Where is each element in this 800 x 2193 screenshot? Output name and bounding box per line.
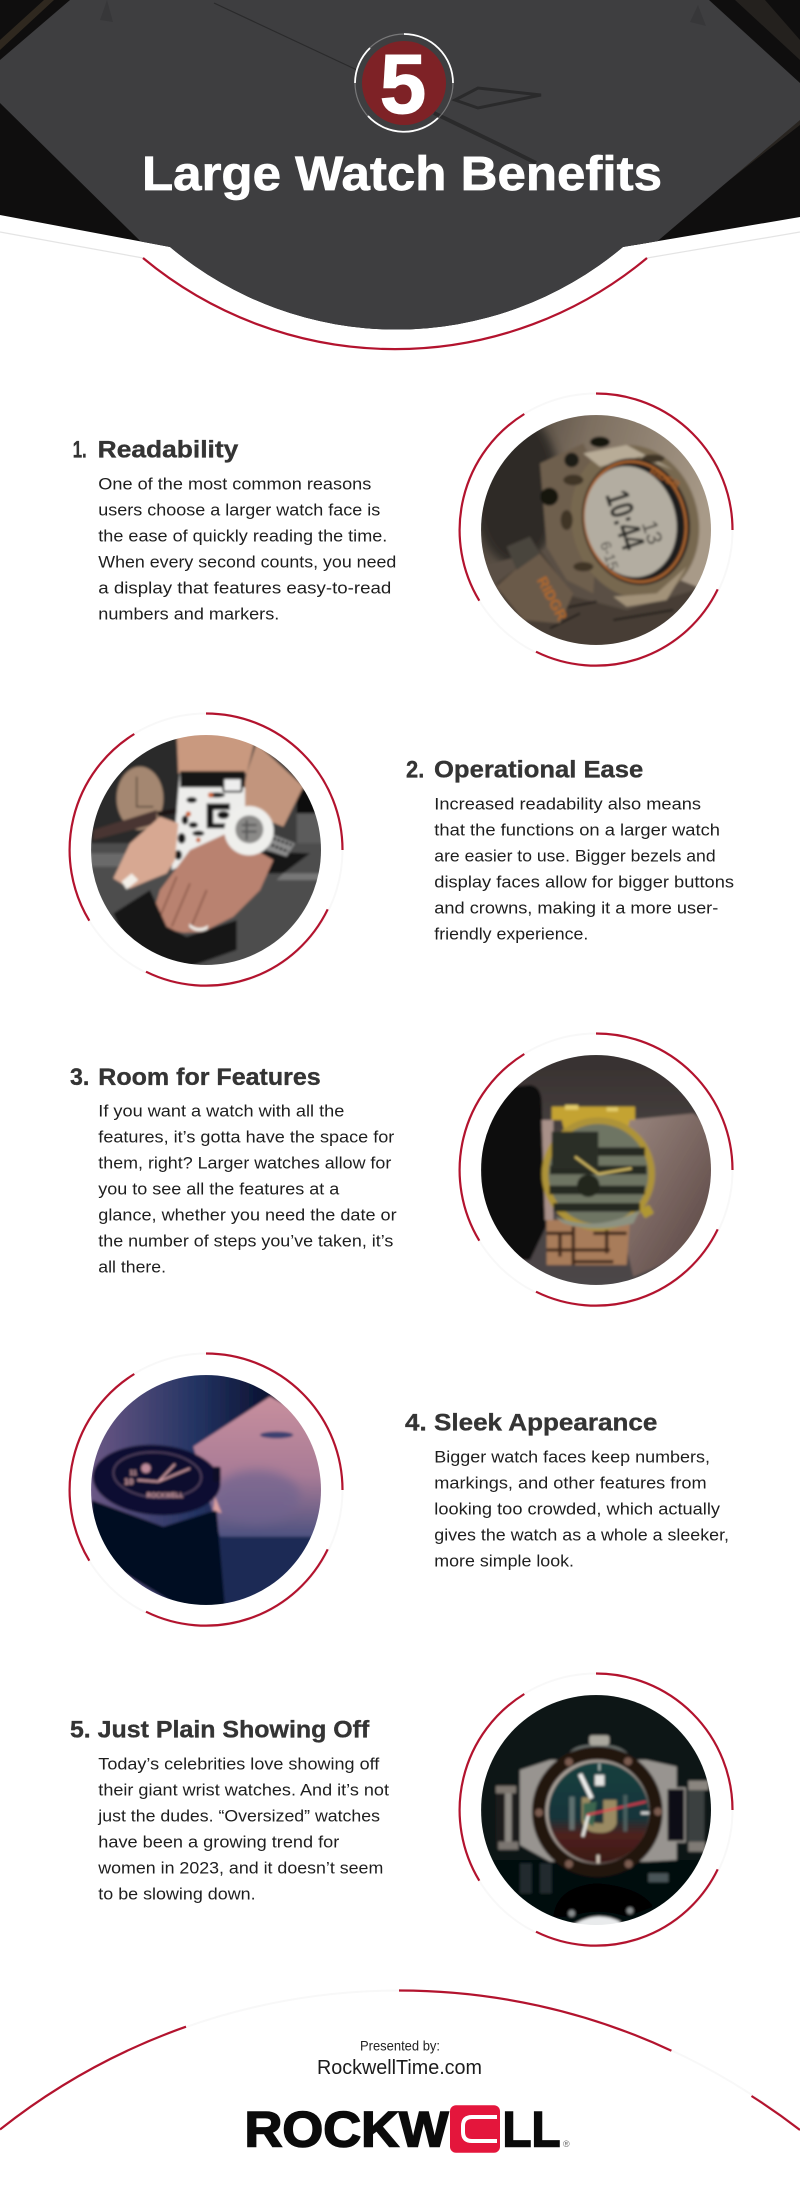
heading 4: Sleek Appearance (434, 1410, 657, 1437)
logo: Rockwell: ® (563, 2139, 570, 2149)
photo 1: camo digital watch: RIDGR (533, 574, 570, 624)
body text 4: markings, and other features from (434, 1474, 707, 1493)
body text 3: glance, whether you need the date or (98, 1206, 397, 1225)
body text 2: are easier to use. Bigger bezels and (434, 846, 716, 865)
body text 2 (434, 794, 734, 943)
body text 4 (434, 1448, 729, 1571)
photo 5: steel watch on black (480, 1693, 713, 1927)
ring arcs 3 (460, 1034, 732, 1306)
heading 3: Room for Features (98, 1064, 321, 1091)
body text 5: to be slowing down. (98, 1884, 256, 1903)
footer arc (0, 1990, 800, 2130)
body text 4: looking too crowded, which actually (434, 1500, 721, 1519)
body text 2: friendly experience. (434, 924, 588, 943)
logo: Rockwell (244, 2102, 570, 2158)
heading 4: 4. (405, 1410, 427, 1437)
heading 1: Readability (98, 437, 239, 464)
body text 3: features, it’s gotta have the space for (98, 1128, 395, 1147)
photo 3: gold flag watch on wrist (480, 1053, 717, 1287)
heading 5: 5. (70, 1717, 91, 1744)
body text 3: you to see all the features at a (98, 1180, 340, 1199)
website: RockwellTime.com (317, 2057, 482, 2079)
photo 1: camo digital watch: RIDGR (648, 466, 681, 491)
photo 4: dark watch in blue and pink: 10 (124, 1477, 134, 1487)
ring arcs 5 (460, 1674, 732, 1946)
photo 4: dark watch in blue and pink: ROCKWELL (147, 1490, 184, 1499)
body text 2: display faces allow for bigger buttons (434, 872, 734, 891)
header red arc (143, 258, 647, 349)
logo: Rockwell: LL (502, 2102, 560, 2158)
heading 1: 1. (73, 437, 87, 464)
body text 3 (98, 1102, 397, 1277)
body text 5: have been a growing trend for (98, 1832, 340, 1851)
section 5: just plain showing off (70, 1717, 389, 1903)
body text 4: gives the watch as a whole a sleeker, (434, 1526, 729, 1545)
body text 5 (97, 1754, 389, 1903)
ring arcs 1 (460, 394, 732, 666)
header: dark watch background (0, 0, 800, 345)
body text 3: them, right? Larger watches allow for (98, 1154, 392, 1173)
badge: number 5: 5 (380, 37, 426, 131)
heading 2: Operational Ease (434, 757, 643, 784)
photo 4: dark watch in blue and pink: 11 (129, 1468, 137, 1477)
heading 5: Just Plain Showing Off (98, 1717, 370, 1744)
badge: number 5 (355, 34, 453, 132)
body text 1: users choose a larger watch face is (98, 500, 380, 519)
body text 3: If you want a watch with all the (98, 1102, 344, 1121)
photo 1: camo digital watch: 10:44 (597, 486, 651, 555)
title: Large Watch Benefits (142, 148, 662, 201)
photo 2: hand tying shoe with white watch (90, 733, 323, 967)
body text 1: When every second counts, you need (98, 552, 396, 571)
body text 1: a display that features easy-to-read (98, 578, 391, 597)
body text 4: Bigger watch faces keep numbers, (434, 1448, 710, 1467)
icon: watch hand shadows (214, 3, 541, 163)
body text 3: all there. (98, 1258, 166, 1277)
body text 2: that the functions on a larger watch (434, 820, 720, 839)
faint divider strokes beside header (0, 232, 800, 258)
heading 3: 3. (70, 1064, 89, 1091)
ring arcs 2 (70, 714, 342, 986)
photo 1: camo digital watch: 6-15 (596, 540, 620, 572)
body text 4: more simple look. (434, 1552, 574, 1571)
section 3: room for features (70, 1064, 397, 1277)
heading 2: 2. (406, 757, 424, 784)
icon: red E mark (450, 2105, 500, 2153)
section 2: operational ease (406, 757, 734, 943)
body text 1 (98, 474, 396, 623)
body text 5: their giant wrist watches. And it’s not (98, 1780, 389, 1799)
ring arcs 4 (70, 1354, 342, 1626)
logo: Rockwell: ROCKW (244, 2102, 449, 2158)
body text 1: the ease of quickly reading the time. (98, 526, 387, 545)
photo 4: dark watch in blue and pink (90, 1373, 327, 1607)
photo 1: camo digital watch: 13 (637, 517, 667, 547)
body text 5: women in 2023, and it doesn’t seem (97, 1858, 383, 1877)
body text 1: numbers and markers. (98, 604, 279, 623)
presented by text: Presented by: (360, 2038, 440, 2054)
body text 5: just the dudes. “Oversized” watches (97, 1806, 380, 1825)
body text 2: Increased readability also means (434, 794, 701, 813)
section 4: sleek appearance (405, 1410, 729, 1571)
body text 5: Today’s celebrities love showing off (98, 1754, 380, 1773)
body text 3: the number of steps you’ve taken, it’s (98, 1232, 393, 1251)
section 1: readability (73, 437, 396, 623)
body text 1: One of the most common reasons (98, 474, 371, 493)
photo 1: camo digital watch (473, 413, 715, 647)
body text 2: and crowns, making it a more user- (434, 898, 718, 917)
